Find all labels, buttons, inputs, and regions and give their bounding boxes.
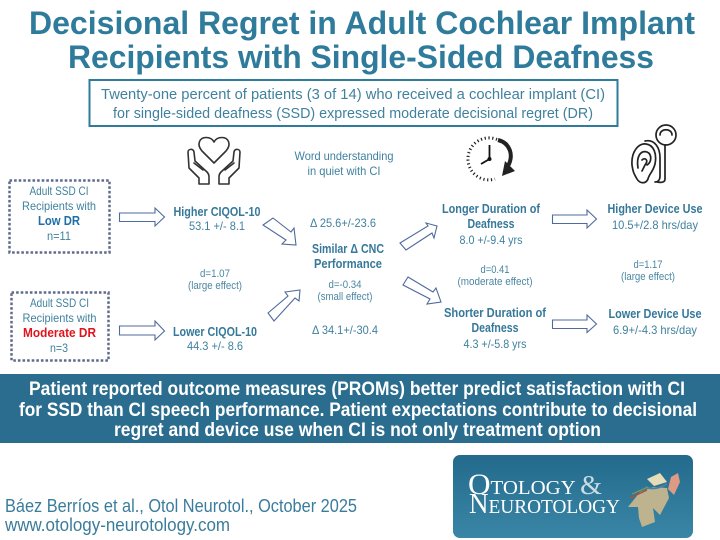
device use effect size: d=1.17 — [634, 259, 662, 271]
summary box: for single-sided deafness (SSD) expressed moderate decisional regret (DR) — [113, 105, 593, 122]
arrow: moderate DR to lower CIQOL — [120, 321, 164, 340]
lower device use: Lower Device Use — [608, 307, 702, 321]
title: Decisional Regret in Adult Cochlear Implant — [29, 5, 695, 41]
panel: moderate DR group: Adult SSD CI — [30, 296, 89, 310]
summary box — [90, 80, 618, 126]
word understanding label: in quiet with CI — [308, 164, 380, 178]
word understanding label — [294, 149, 394, 178]
similar CNC performance — [312, 242, 384, 271]
arrow: higher CIQOL to CNC — [263, 218, 296, 245]
logo: temporal bone illustration — [628, 473, 680, 527]
citation — [4, 496, 357, 535]
deafness effect size — [458, 264, 532, 288]
longer duration of deafness: Longer Duration of — [442, 202, 541, 216]
conclusion banner: regret and device use when CI is not only treatment option — [114, 420, 601, 441]
icon: ear with cochlear implant — [632, 125, 676, 183]
longer duration of deafness: Deafness — [468, 217, 515, 231]
delta CNC higher group: Δ 25.6+/-23.6 — [310, 216, 376, 230]
device use effect size: (large effect) — [621, 271, 675, 283]
similar CNC performance: Performance — [314, 257, 382, 271]
device use effect size — [621, 259, 675, 283]
lower device use — [608, 307, 702, 337]
panel: low DR group: Low DR — [38, 213, 81, 228]
similar CNC performance: Similar Δ CNC — [312, 242, 384, 256]
journal logo: OTOLOGY & — [468, 468, 602, 501]
CNC effect size: (small effect) — [318, 291, 372, 303]
panel: low DR group: Adult SSD CI — [30, 184, 88, 198]
CIQOL effect size: d=1.07 — [200, 268, 230, 280]
CNC effect size: d=-0.34 — [328, 279, 362, 291]
journal logo — [453, 455, 693, 538]
higher device use: 10.5+/2.8 hrs/day — [612, 218, 698, 232]
conclusion banner — [0, 374, 720, 443]
word understanding label: Word understanding — [294, 149, 394, 163]
deafness effect size: d=0.41 — [480, 264, 510, 276]
arrow: longer duration to higher use — [552, 210, 596, 228]
lower CIQOL-10: 44.3 +/- 8.6 — [187, 339, 243, 353]
icon: hands holding heart — [188, 138, 240, 184]
higher device use: Higher Device Use — [608, 202, 703, 216]
panel: moderate DR group: n=3 — [50, 341, 68, 355]
icon: clock with arrow — [468, 138, 515, 180]
panel: moderate DR group: Recipients with — [22, 311, 96, 325]
citation: www.otology-neurotology.com — [4, 515, 230, 535]
arrow: lower CIQOL to CNC — [268, 290, 300, 321]
panel: low DR group: n=11 — [47, 229, 71, 243]
citation: Báez Berríos et al., Otol Neurotol., October 2025 — [5, 496, 357, 516]
title: Recipients with Single-Sided Deafness — [68, 39, 654, 75]
CNC effect size — [318, 279, 372, 303]
shorter duration of deafness: Shorter Duration of — [444, 306, 547, 320]
title — [29, 5, 695, 75]
shorter duration of deafness: Deafness — [472, 321, 519, 335]
panel: low DR group — [10, 180, 110, 252]
longer duration of deafness: 8.0 +/-9.4 yrs — [460, 233, 522, 247]
summary box: Twenty-one percent of patients (3 of 14) who received a cochlear implant (CI) — [101, 86, 605, 103]
arrow: shorter duration to lower use — [552, 315, 596, 332]
higher CIQOL-10 — [174, 205, 261, 233]
shorter duration of deafness — [444, 306, 547, 351]
CIQOL effect size: (large effect) — [188, 280, 242, 292]
deafness effect size: (moderate effect) — [458, 276, 532, 288]
arrow: CNC to shorter duration — [403, 277, 441, 304]
higher CIQOL-10: Higher CIQOL-10 — [174, 205, 261, 219]
panel: low DR group: Recipients with — [22, 199, 96, 213]
arrow: CNC to longer duration — [400, 223, 437, 250]
journal logo: NEUROTOLOGY — [469, 489, 620, 520]
arrow: low DR to higher CIQOL — [120, 208, 164, 226]
CIQOL effect size — [188, 268, 242, 292]
lower CIQOL-10: Lower CIQOL-10 — [173, 325, 257, 339]
higher CIQOL-10: 53.1 +/- 8.1 — [189, 219, 245, 233]
lower CIQOL-10 — [173, 325, 257, 353]
panel: moderate DR group — [12, 292, 108, 360]
shorter duration of deafness: 4.3 +/-5.8 yrs — [464, 337, 526, 351]
delta CNC lower group: Δ 34.1+/-30.4 — [312, 323, 378, 337]
higher device use — [608, 202, 703, 232]
lower device use: 6.9+/-4.3 hrs/day — [613, 323, 697, 337]
longer duration of deafness — [442, 202, 541, 247]
panel: moderate DR group: Moderate DR — [23, 325, 97, 340]
